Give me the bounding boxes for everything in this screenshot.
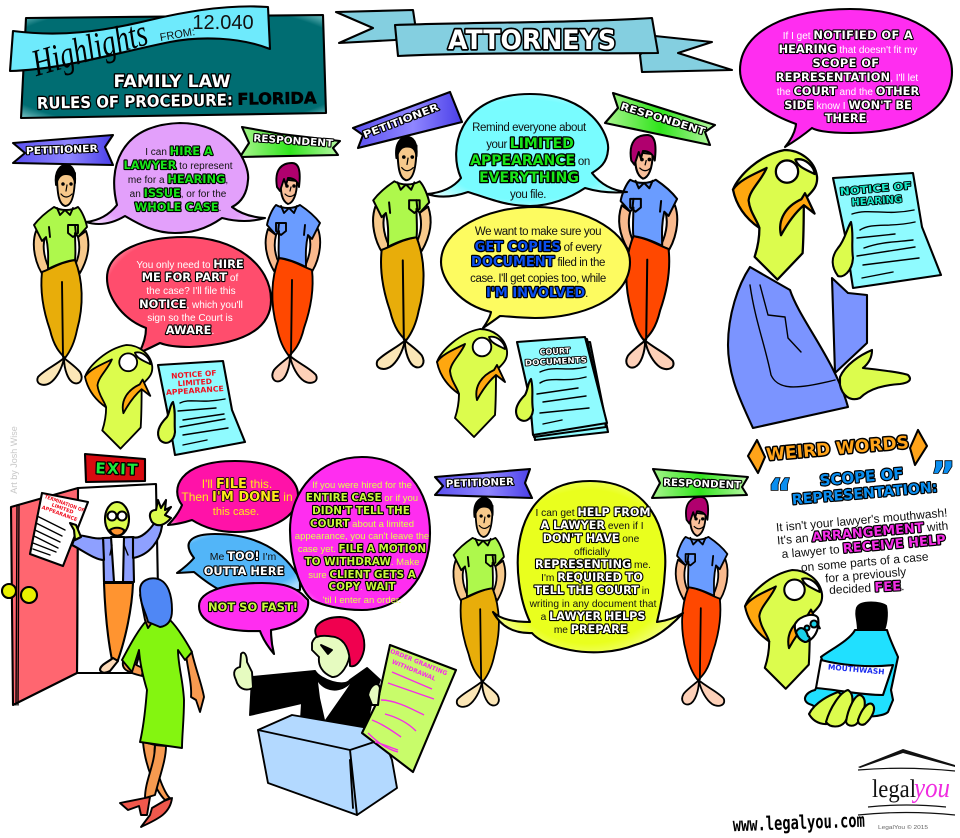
- subtitle: family law: FAMILY LAW: [114, 72, 231, 92]
- document: termination of limited appearance: [30, 493, 88, 566]
- document stack: court documents: [516, 337, 608, 440]
- speech bubble: help from a lawyer: writing in any document that: [529, 599, 657, 610]
- definition text: on some parts of a case: [800, 549, 929, 575]
- speech bubble: help from a lawyer: me PREPARE.: [554, 623, 630, 636]
- speech bubble: hire me for part: [107, 237, 271, 353]
- speech bubble: big explanation: 'til I enter an order.: [323, 595, 401, 606]
- figure: woman in green dress: [120, 578, 204, 827]
- footer credit: art by: Art by Josh Wise: [9, 426, 19, 494]
- speech bubble: help from a lawyer: a LAWYER HELPS: [541, 610, 645, 623]
- logo: legal you: [858, 749, 955, 831]
- speech bubble: big explanation: If you were hired for the: [312, 480, 412, 491]
- document: notice of hearing: HEARING: [851, 194, 903, 209]
- speech bubble: me too: Me TOO! I'm: [210, 549, 276, 563]
- logo: legal you: you: [911, 773, 950, 804]
- speech bubble: notified of hearing: REPRESENTATION, I'll let: [776, 70, 918, 84]
- speech bubble: notified of hearing: [740, 9, 952, 147]
- banner: respondent: [652, 469, 748, 498]
- document: notice of hearing: [833, 173, 941, 288]
- speech bubble: big explanation: appearance, you can't leave the: [295, 531, 429, 542]
- figure: attorney in doorway: [70, 500, 171, 673]
- cyan wavy banner: [10, 6, 270, 71]
- speech bubble: remind everyone: EVERYTHING: [479, 170, 579, 186]
- term: scope of representation: REPRESENTATION:: [791, 480, 938, 508]
- term: scope of representation: [768, 454, 955, 515]
- figure: petitioner: [34, 165, 88, 385]
- figure: petitioner: [453, 498, 505, 707]
- subtitle: rules of procedure: RULES OF PROCEDURE:: [37, 90, 233, 113]
- speech bubble: hire me for part: AWARE.: [166, 323, 214, 337]
- speech bubble: hire me for part: ME FOR PART of: [142, 270, 238, 284]
- document: order granting withdrawal: ORDER GRANTING: [389, 648, 448, 677]
- speech bubble: notified of hearing: SIDE know I WON'T BE: [784, 98, 912, 112]
- banner: petitioner: PETITIONER: [446, 477, 514, 490]
- speech bubble: notified of hearing: HEARING that doesn't fit my: [779, 42, 917, 56]
- document stack: court documents: DOCUMENTS: [525, 355, 587, 368]
- document: notice of hearing: NOTICE OF: [839, 181, 912, 198]
- definition text: a lawyer to RECEIVE HELP: [781, 533, 946, 562]
- speech bubble: remind everyone: [427, 94, 627, 206]
- speech bubble: help from a lawyer: DON'T HAVE one: [543, 532, 640, 545]
- website address: www.legalyou.com: [732, 810, 865, 836]
- speech bubble: help from a lawyer: officially: [574, 547, 611, 558]
- document: order granting withdrawal: [362, 645, 456, 772]
- banner: petitioner: [13, 135, 113, 165]
- speech bubble: big explanation: COURT about a limited: [310, 518, 414, 530]
- panel: exit scene: [2, 454, 456, 827]
- from label: FROM:: [159, 26, 196, 44]
- speech bubble: help from a lawyer: A LAWYER even if I: [540, 519, 644, 532]
- logo: legal you: LegalYou © 2015: [878, 824, 928, 831]
- banner: petitioner: PETITIONER: [362, 102, 441, 141]
- document: notice of limited appearance: NOTICE OF: [171, 368, 217, 381]
- term: scope of representation: “: [768, 471, 792, 515]
- banner: petitioner: [435, 469, 532, 498]
- document: notice of limited appearance: [158, 361, 245, 455]
- speech bubble: get copies: case. I'll get copies too, while: [470, 273, 606, 285]
- document: termination of limited appearance: LIMITED: [51, 502, 74, 516]
- speech bubble: get copies: GET COPIES of every: [475, 240, 602, 255]
- speech bubble: I'll file this: Then I'M DONE in: [181, 490, 293, 505]
- banner: respondent: RESPONDENT: [663, 478, 741, 491]
- heading ribbon: Attorneys: ATTORNEYS: [448, 25, 616, 56]
- speech bubble: hire a lawyer: [86, 123, 265, 233]
- exit sign: EXIT: [95, 459, 139, 479]
- character: lawyer with notice: [85, 345, 152, 449]
- door frame: [77, 484, 158, 673]
- panel: limited appearance: [353, 92, 715, 440]
- speech bubble: notified of hearing: If I get NOTIFIED OF A: [783, 28, 913, 42]
- hand gripping bottle: [809, 692, 842, 724]
- figure: judge: [234, 617, 397, 815]
- character: lawyer with mouthwash: [745, 570, 822, 689]
- subtitle: Florida: FLORIDA: [237, 88, 317, 109]
- definition text: for a previously: [825, 564, 907, 586]
- document: notice of limited appearance: LIMITED: [177, 377, 212, 388]
- speech bubble: notified of hearing: THERE.: [825, 111, 869, 125]
- speech bubble: big explanation: case yet. FILE A MOTION: [298, 543, 426, 555]
- definition text: It isn't your lawyer's mouthwash!: [775, 506, 948, 534]
- definition text: decided FEE.: [829, 579, 905, 598]
- figure: respondent: [676, 497, 728, 706]
- speech bubble: me too: OUTTA HERE: [204, 564, 284, 578]
- speech bubble: not so fast: NOT SO FAST!: [208, 600, 298, 614]
- document stack: court documents: COURT: [539, 346, 571, 357]
- door knobs: [2, 584, 16, 598]
- heading: weird words: [748, 430, 927, 473]
- teal header plate: [21, 15, 326, 118]
- figure: respondent: [266, 163, 320, 383]
- rule number: 12.040: [192, 12, 254, 34]
- term: scope of representation: SCOPE OF: [819, 464, 904, 490]
- exit sign: [85, 454, 145, 482]
- speech bubble: hire a lawyer: WHOLE CASE.: [135, 200, 221, 214]
- judge's bench: [258, 715, 397, 815]
- document: order granting withdrawal: WITHDRAWAL: [391, 659, 437, 683]
- banner: respondent: [605, 93, 715, 145]
- door: [2, 488, 78, 705]
- speech bubble: get copies: [441, 207, 630, 328]
- definition text: It's an ARRANGEMENT with: [776, 519, 949, 548]
- speech bubble: remind everyone: Remind everyone about: [472, 122, 587, 134]
- speech bubble: help from a lawyer: REPRESENTING me.: [535, 558, 651, 571]
- definition text: [775, 506, 949, 598]
- banner: respondent: RESPONDENT: [619, 101, 707, 138]
- panel: notice of hearing: [728, 9, 952, 428]
- speech bubble: I'll file this: this case.: [213, 506, 259, 518]
- document: notice of limited appearance: APPEARANCE: [166, 384, 224, 397]
- speech bubble: get copies: I'M INVOLVED.: [486, 286, 588, 301]
- speech bubble: big explanation: COPY. WAIT: [329, 581, 396, 593]
- speech bubble: I'll file this: [168, 461, 298, 532]
- speech bubble: help from a lawyer: [493, 481, 683, 652]
- speech bubble: hire me for part: NOTICE, which you'll: [139, 297, 243, 311]
- speech bubble: I'll file this: I'll FILE this.: [202, 477, 272, 492]
- speech bubble: help from a lawyer: I'm REQUIRED TO: [541, 571, 643, 584]
- mouth rinsing: [795, 615, 818, 642]
- banner: respondent: RESPONDENT: [253, 133, 334, 150]
- panel: hire a lawyer: [13, 123, 340, 455]
- speech bubble: big explanation: DIDN'T TELL THE: [312, 505, 410, 517]
- document: termination of limited appearance: TERMINATION OF: [44, 494, 85, 514]
- heading: weird words: WEIRD WORDS: [765, 433, 910, 465]
- logo: legal you: legal: [872, 776, 916, 803]
- speech bubble: get copies: We want to make sure you: [475, 226, 601, 238]
- figure: respondent: [619, 135, 677, 369]
- speech bubble: hire me for part: You only need to HIRE: [136, 257, 244, 271]
- mouthwash bottle: MOUTHWASH: [828, 663, 885, 676]
- speech bubble: notified of hearing: the COURT and the OTHER: [777, 84, 919, 98]
- mouthwash bottle: [805, 602, 898, 726]
- speech bubble: remind everyone: APPEARANCE on: [470, 153, 590, 169]
- speech bubble: remind everyone: you file.: [510, 189, 546, 201]
- figure: petitioner: [373, 137, 431, 369]
- term: scope of representation: ”: [931, 454, 955, 498]
- speech bubble: not so fast: [199, 583, 308, 654]
- speech bubble: hire me for part: sign so the Court is: [147, 313, 233, 324]
- speech bubble: big explanation: [290, 457, 430, 610]
- panel: title block: [10, 6, 326, 118]
- speech bubble: me too: [177, 534, 300, 590]
- character: lawyer with documents: [437, 329, 507, 437]
- heading: Highlights: Highlights: [26, 12, 152, 85]
- speech bubble: big explanation: ENTIRE CASE or if you: [306, 492, 418, 504]
- heading ribbon: Attorneys: [336, 10, 732, 72]
- banner: petitioner: [353, 92, 462, 148]
- speech bubble: hire a lawyer: LAWYER to represent: [123, 158, 233, 172]
- character: lawyer suit: [728, 267, 910, 428]
- speech bubble: hire me for part: the case? I'll file this: [146, 286, 236, 297]
- panel: help from a lawyer: [435, 469, 748, 707]
- document: termination of limited appearance: APPEARANCE: [41, 505, 79, 523]
- speech bubble: remind everyone: your LIMITED: [486, 136, 574, 152]
- speech bubble: notified of hearing: SCOPE OF: [812, 56, 880, 70]
- speech bubble: hire a lawyer: an ISSUE, or for the: [130, 186, 227, 200]
- speech bubble: big explanation: TO WITHDRAW. Make: [305, 556, 419, 568]
- character: lawyer head: [733, 150, 817, 280]
- speech bubble: big explanation: sure CLIENT GETS A: [308, 569, 416, 581]
- speech bubble: hire a lawyer: I can HIRE A: [145, 144, 213, 158]
- speech bubble: help from a lawyer: I can get HELP FROM: [535, 506, 651, 519]
- panel: weird words: [732, 430, 955, 836]
- speech bubble: hire a lawyer: me for a HEARING,: [128, 172, 228, 186]
- speech bubble: help from a lawyer: TELL THE COURT in: [534, 584, 650, 597]
- banner: petitioner: PETITIONER: [26, 144, 98, 157]
- banner: respondent: [240, 127, 340, 157]
- speech bubble: get copies: DOCUMENT filed in the: [471, 255, 605, 270]
